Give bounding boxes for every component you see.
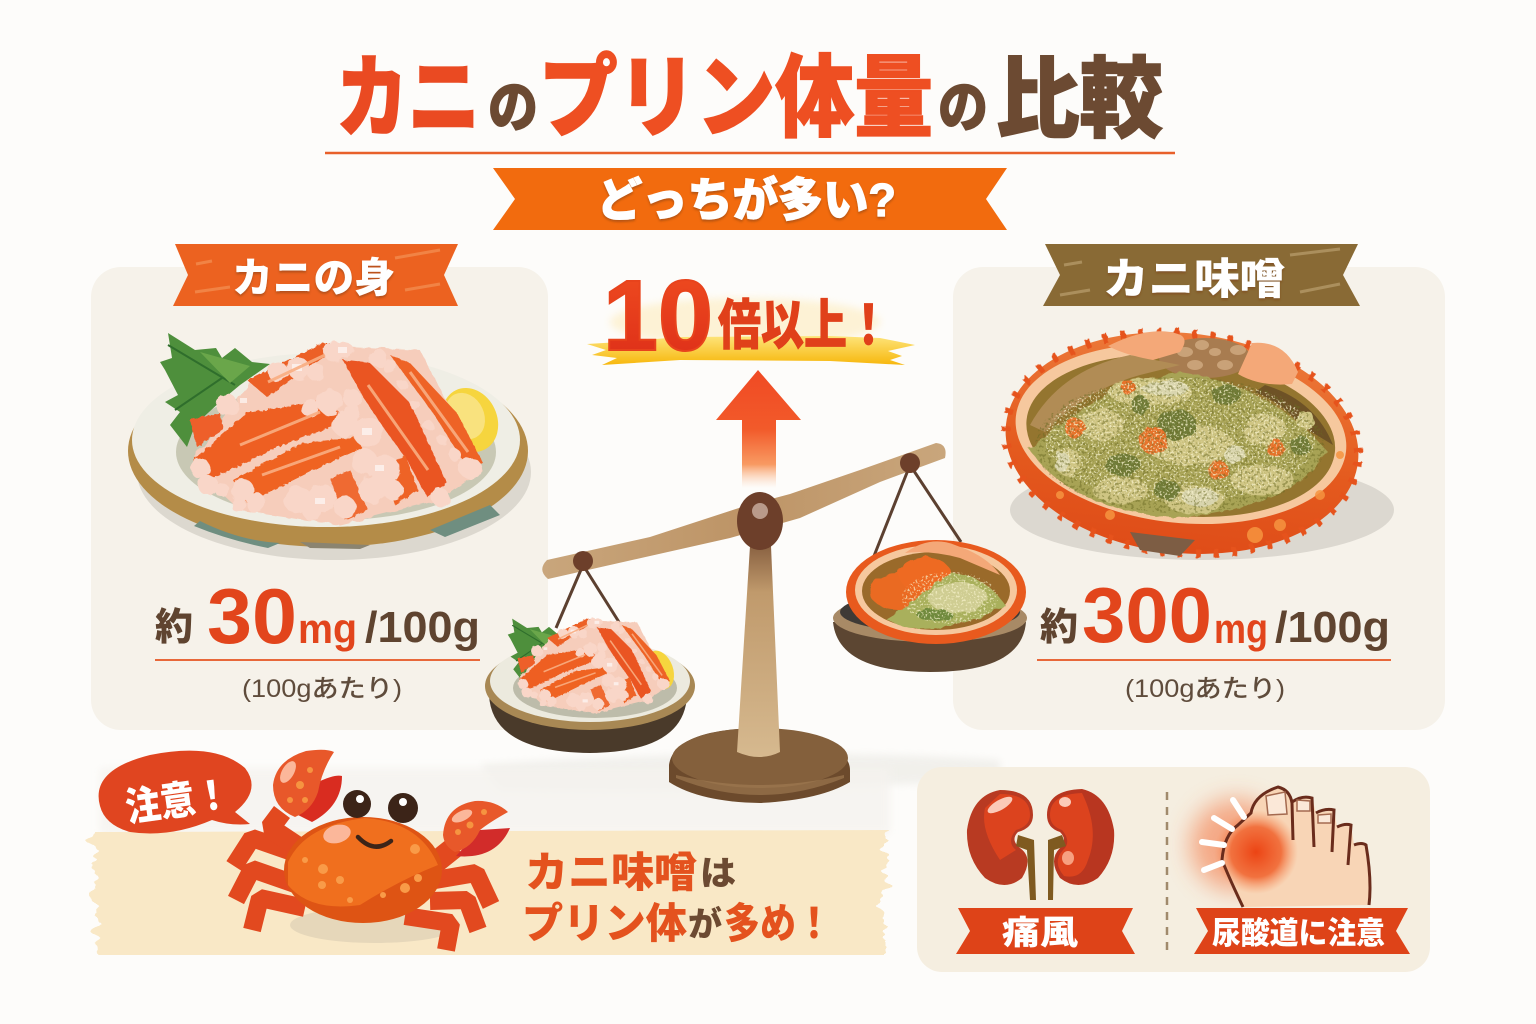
pale glow behind text: [610, 298, 880, 346]
callout: more than 10 times: [587, 260, 915, 372]
callout: more than 10 times: 倍以上！: [718, 296, 890, 356]
ribbon: crab meat label: カニの身: [232, 255, 395, 301]
crab claw right: [443, 801, 510, 856]
value: 300 mg per 100 g: 約: [1040, 607, 1078, 649]
ribbon: gout: [956, 908, 1135, 954]
panel: crab miso: [953, 244, 1445, 730]
crab claw left: [273, 750, 342, 822]
callout: more than 10 times: 10: [603, 260, 713, 372]
lemon: [432, 379, 508, 461]
warning message: は: [700, 855, 736, 893]
panel: health risks: [917, 767, 1430, 972]
right pan with crab miso: [833, 540, 1027, 672]
filling blobs: [1030, 372, 1326, 518]
warning message: 多め！: [724, 900, 832, 947]
speech bubble: caution: 注意！: [123, 773, 233, 831]
panel background: [953, 267, 1445, 730]
speech bubble: caution: [99, 751, 252, 834]
crab body: [284, 817, 442, 923]
title: プリン体量: [539, 49, 933, 149]
title: の: [488, 76, 538, 139]
value underline: [155, 659, 480, 661]
subtitle ribbon: どっちが多い?: [597, 174, 896, 226]
scale base: [669, 728, 850, 803]
right pivot: [900, 453, 920, 473]
arrow: upward: [716, 370, 801, 488]
note: (100gあたり): [242, 675, 402, 703]
scale beam: [542, 443, 946, 579]
warning message: カニ味噌: [525, 849, 697, 896]
ribbon: uric acid: [1194, 908, 1410, 954]
value: 300 mg per 100 g: 300: [1082, 571, 1212, 659]
title: カニ: [336, 49, 480, 149]
divider: [1166, 792, 1168, 955]
illustration: crab miso shell: [994, 315, 1394, 571]
icon: inflamed foot: [1190, 787, 1370, 907]
pivot knob: [737, 492, 783, 550]
inner shell walls: [1030, 355, 1180, 432]
right strings: [874, 465, 961, 556]
ribbon: gout: 痛風: [1002, 914, 1078, 951]
title underline: [325, 152, 1175, 154]
filling speckle: [1035, 377, 1325, 513]
value: 300 mg per 100 g: /100g: [1275, 603, 1390, 652]
scale post: [737, 546, 780, 757]
value: 30 mg per 100 g: [155, 572, 480, 660]
warning message: プリン体: [522, 900, 687, 947]
crab mouth: [358, 837, 391, 847]
title: の: [938, 76, 988, 139]
upper bottom wash: [100, 768, 890, 834]
value: 300 mg per 100 g: [1040, 571, 1390, 659]
banner: warning tape: [92, 830, 885, 955]
filling sprinkles: [1045, 378, 1315, 502]
value underline: [1037, 659, 1391, 661]
warning message: [522, 849, 832, 947]
crab eyes: [343, 790, 418, 823]
value: 300 mg per 100 g: mg: [1214, 605, 1268, 652]
yellow brush: [587, 336, 915, 365]
title: 比較: [996, 50, 1163, 149]
icon: kidneys: [967, 789, 1114, 900]
warning message: が: [688, 905, 722, 944]
illustration: crab meat plate: [128, 333, 531, 560]
shell flaps: [1108, 331, 1185, 360]
innards at top of shell: [1159, 338, 1251, 378]
value: 30 mg per 100 g: 30: [207, 572, 297, 660]
floor wash: [480, 754, 1000, 791]
value: 30 mg per 100 g: /100g: [365, 603, 480, 652]
illustration: balance scale: [485, 443, 1027, 803]
panel background: [91, 267, 548, 730]
ribbon: crab miso label: カニ味噌: [1103, 256, 1285, 304]
value: 30 mg per 100 g: 約: [155, 607, 193, 649]
illustration: cartoon crab: [234, 750, 510, 950]
value: 30 mg per 100 g: mg: [298, 605, 357, 652]
title: [336, 49, 1163, 149]
crab shell highlights: [288, 818, 438, 906]
left strings: [556, 565, 624, 630]
subtitle ribbon: [493, 168, 1007, 230]
crab legs: [234, 812, 491, 950]
left pivot: [573, 551, 593, 571]
ribbon: uric acid: 尿酸道に注意: [1212, 916, 1385, 951]
ribbon: crab miso label: [1043, 244, 1360, 306]
note: (100gあたり): [1125, 675, 1285, 703]
panel: crab meat: [91, 244, 548, 730]
ribbon: crab meat label: [173, 244, 458, 306]
left pan with crab meat: [485, 618, 695, 753]
panel background: [917, 767, 1430, 972]
